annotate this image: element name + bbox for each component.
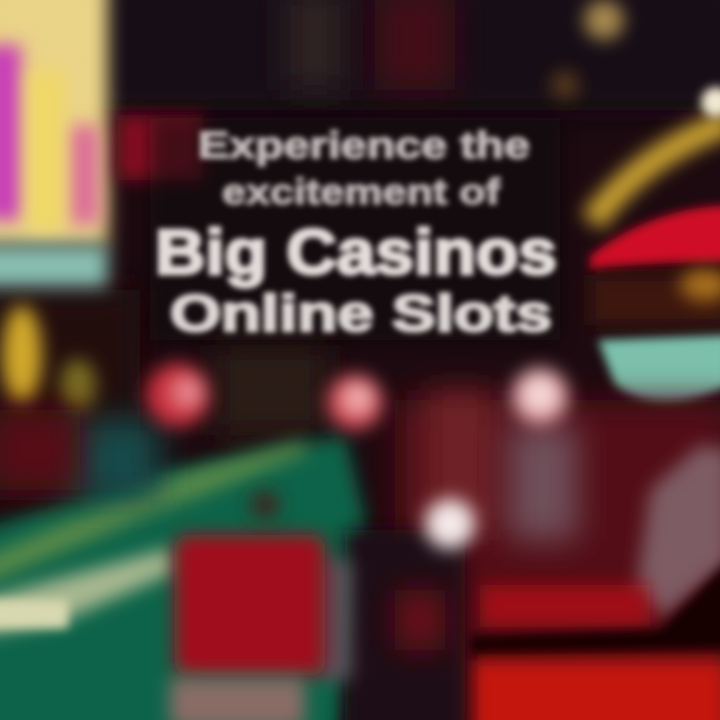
title line 3: Big Casinos: [155, 216, 557, 288]
left slot machine: [0, 0, 108, 490]
red wall patch: [118, 115, 203, 180]
green casino floor: [0, 420, 365, 720]
title line 2: excitement of: [222, 171, 501, 212]
title line 1: Experience the: [198, 125, 530, 167]
ceiling lights: [551, 0, 624, 99]
title: [150, 118, 560, 343]
white and red lamps: [146, 363, 568, 549]
right machine top: [590, 87, 720, 402]
title line 4: Online Slots: [170, 285, 552, 343]
red dress figure: [170, 490, 325, 720]
dark figure: [318, 530, 465, 720]
red seating area: [395, 390, 720, 720]
